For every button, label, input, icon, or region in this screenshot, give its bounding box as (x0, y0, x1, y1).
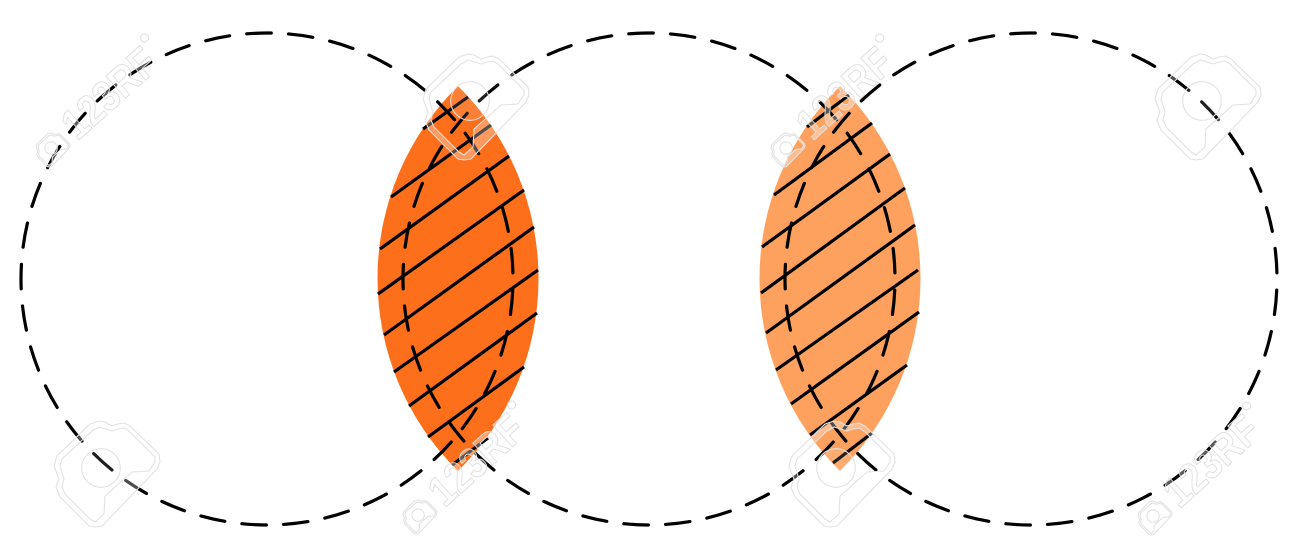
watermark: bottom-centre camera (789, 421, 895, 527)
right dashed circle (785, 33, 1277, 525)
left overlap: dark orange lens (377, 86, 539, 471)
watermark: top-left logo text: 123RF (52, 38, 167, 149)
watermark: bottom-right logo text: 123RF (1154, 406, 1269, 517)
watermark: top-centre-right logo text: 123RF (787, 38, 902, 149)
watermark: top-middle camera (423, 54, 529, 160)
right overlap: light orange lens (759, 86, 921, 471)
hatching on right lens (761, 95, 919, 463)
watermark: bottom-middle logo text: 123RF (419, 405, 534, 516)
hatching on left lens (378, 97, 538, 465)
left dashed circle (21, 33, 513, 525)
watermark: bottom-left camera (54, 421, 160, 527)
middle dashed circle (403, 33, 895, 525)
watermark: top-right camera (1155, 54, 1261, 160)
